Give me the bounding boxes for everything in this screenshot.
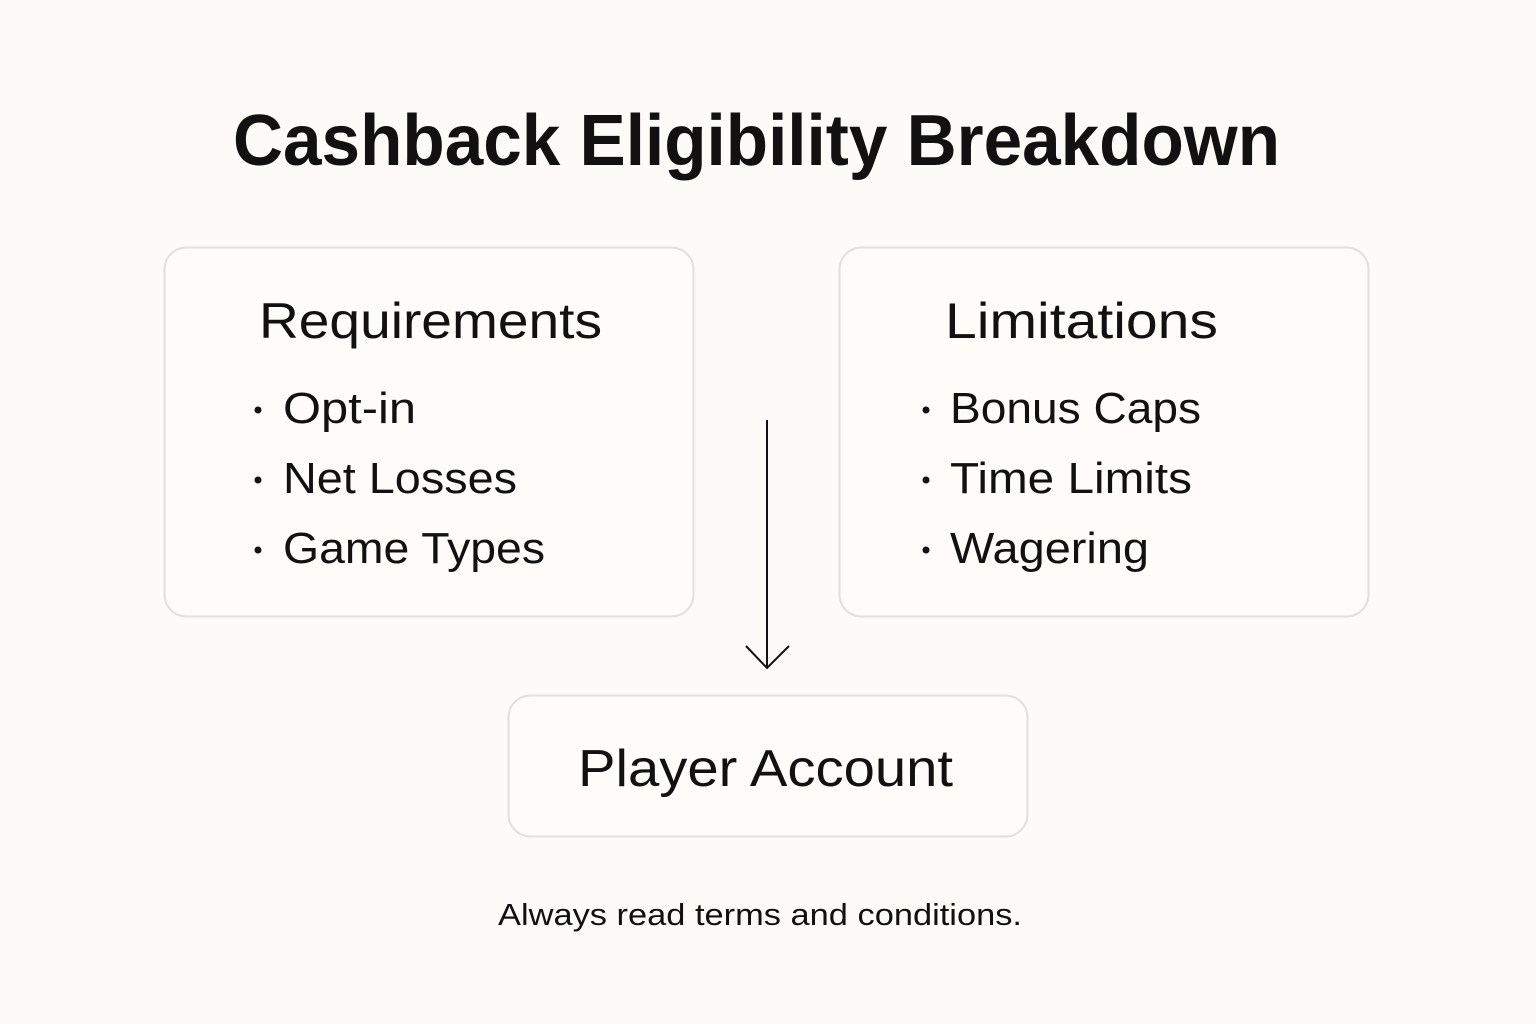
panel: player account: Player Account: [578, 740, 954, 798]
footer note: Always read terms and conditions.: [498, 897, 1022, 932]
list: requirements items: Game Types: [283, 524, 545, 573]
heading: requirements: Requirements: [259, 293, 602, 349]
list: limitation items: Time Limits: [950, 454, 1192, 503]
title: Cashback Eligibility Breakdown: [233, 101, 1280, 181]
panel: requirements: [164, 248, 694, 616]
list: requirements items: Net Losses: [283, 454, 517, 503]
heading: limitations: Limitations: [945, 293, 1218, 349]
arrow: [746, 420, 789, 668]
panel: player account: [508, 696, 1028, 836]
list: limitation items: Bonus Caps: [950, 384, 1201, 433]
list: limitation items: [922, 384, 1201, 573]
list: requirements items: [254, 384, 545, 573]
list: limitation items: Wagering: [950, 524, 1149, 573]
list: requirements items: Opt-in: [283, 384, 416, 433]
panel: limitations: [840, 248, 1368, 616]
